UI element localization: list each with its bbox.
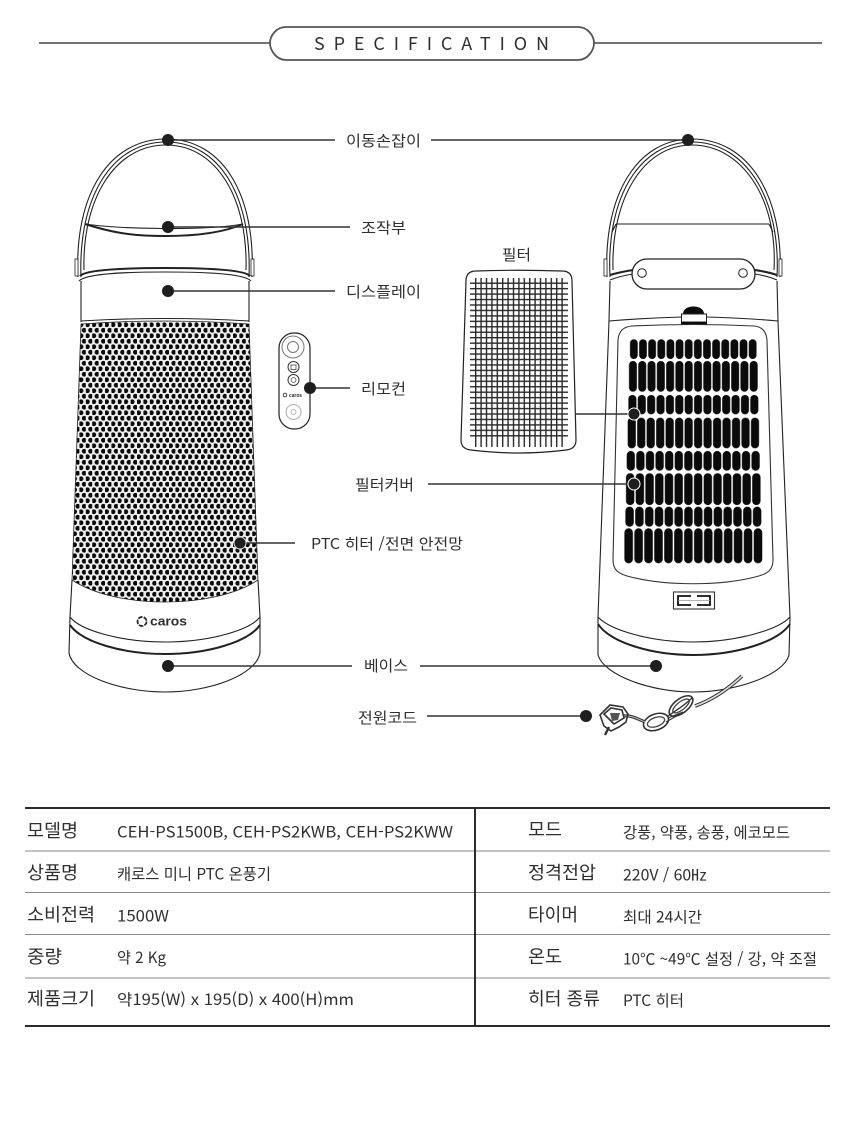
table row: power: 최대 24시간 [623, 906, 702, 928]
handle [75, 139, 254, 277]
filter cover [613, 324, 773, 584]
vent icon [674, 592, 714, 609]
callout: display: 디스플레이 [346, 281, 421, 302]
table row: model: 강풍, 약풍, 송풍, 에코모드 [623, 821, 790, 843]
lower body [70, 580, 260, 642]
table row: size: 히터 종류 [528, 985, 600, 1011]
callout: remote [304, 378, 406, 399]
callout: filter [502, 244, 640, 420]
table row: model [27, 816, 790, 843]
table row: size [27, 985, 684, 1011]
callout: power cord: 전원코드 [358, 707, 417, 728]
table row: size: 약195(W) x 195(D) x 400(H)mm [117, 988, 354, 1010]
table row: power: 1500W [117, 904, 169, 926]
base [69, 617, 260, 692]
callout: handle [162, 130, 694, 151]
callout: filter: 필터 [502, 244, 531, 265]
table row: size: 제품크기 [27, 985, 95, 1011]
control panel [85, 224, 243, 236]
table row: power: 타이머 [528, 901, 578, 927]
callout: PTC heater [234, 533, 463, 554]
callout: remote: 리모컨 [361, 378, 406, 399]
illustration: heater front view [69, 139, 260, 692]
callout: filter cover: 필터커버 [355, 474, 414, 495]
display band [79, 268, 251, 322]
callout: control panel: 조작부 [361, 217, 406, 238]
rear body [598, 281, 790, 642]
handle [604, 139, 782, 277]
air vent slots [624, 339, 763, 563]
upper panel and cap [610, 224, 777, 289]
table row: size: PTC 히터 [623, 989, 684, 1011]
specification table [25, 808, 830, 1026]
callout: display [162, 281, 421, 302]
table row: weight: 약 2 Kg [117, 946, 166, 968]
table row: weight: 온도 [528, 943, 562, 969]
latch [681, 306, 707, 326]
front safety grille [72, 321, 258, 602]
icon: power cord [600, 676, 742, 735]
callout: power cord [358, 707, 592, 728]
illustration: remote control [279, 333, 310, 429]
table row: product name: 정격전압 [528, 859, 596, 885]
table row: product name: 캐로스 미니 PTC 온풍기 [117, 862, 271, 884]
table row: power [27, 901, 702, 928]
rear base [598, 617, 790, 692]
table row: model: 모드 [528, 816, 562, 842]
title [39, 27, 822, 60]
table row: weight: 중량 [27, 943, 62, 969]
callout: control panel [162, 217, 406, 238]
table row: product name [27, 859, 707, 886]
logo: caros: caros [150, 614, 187, 628]
callout: filter cover [355, 474, 640, 495]
illustration: filter [461, 270, 576, 453]
illustration: heater rear view [598, 139, 790, 692]
callout: base: 베이스 [364, 655, 408, 676]
illustration: remote control: caros [289, 393, 302, 399]
callout: PTC heater: PTC 히터 /전면 안전망 [311, 533, 463, 554]
table row: power: 소비전력 [27, 901, 95, 927]
callout: base [162, 655, 662, 676]
table row: model: 모델명 [27, 817, 78, 843]
table row: weight [27, 943, 817, 970]
table row: weight: 10℃ ~49℃ 설정 / 강, 약 조절 [623, 948, 817, 970]
title: SPECIFICATION [314, 30, 549, 56]
table row: product name: 상품명 [27, 859, 78, 885]
table row: model: CEH-PS1500B, CEH-PS2KWB, CEH-PS2KWW [117, 820, 453, 842]
table row: product name: 220V / 60㎐ [623, 864, 707, 886]
callout: handle: 이동손잡이 [346, 130, 421, 151]
